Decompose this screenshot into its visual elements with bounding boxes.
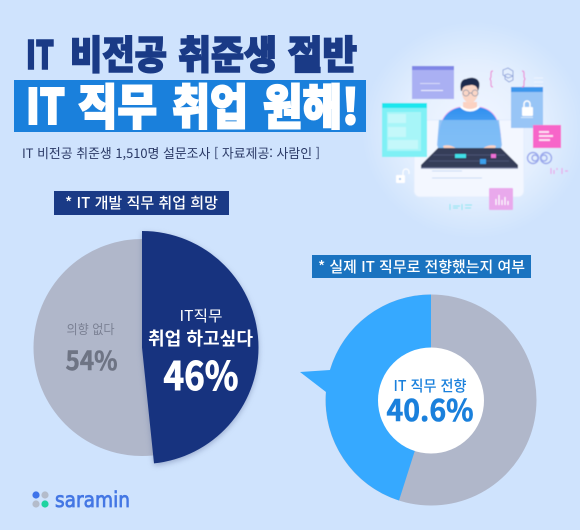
donut chart: actual transition [300,294,536,506]
title line 1: 비전공 [70,25,167,81]
chart tile [489,188,513,210]
title banner: IT [26,68,65,138]
logo: saramin: saramin [55,488,130,512]
label: no intention: 54% [66,341,118,378]
lock window [511,87,543,128]
person [437,78,502,157]
title banner [14,68,366,138]
label: want IT job [148,305,253,402]
hair [460,78,479,91]
centre label: IT 직무 전향 [394,375,467,396]
face [462,81,478,103]
glass panel lines [432,171,482,178]
keyboard [421,148,518,168]
donut slice: transitioned with pointer [300,294,431,500]
slice shadow [142,233,258,465]
pie slice: no intention [34,239,250,456]
donut slice: others [326,294,536,506]
label: IT dev job hope: * IT 개발 직무 취업 희망 [65,192,218,213]
title banner: 원해! [263,68,359,138]
menu lines [534,78,543,86]
open padlock [396,169,409,183]
neck [463,102,477,110]
centre label: 40.6% [386,386,474,430]
label: no intention [66,319,118,378]
title line 1: 절반 [288,25,357,81]
small marks [551,168,568,174]
logo: saramin [32,488,130,512]
pink card [533,125,561,148]
title line 1: IT [26,25,54,81]
glass panel [414,120,524,197]
purple window [412,66,454,99]
donut centre [378,348,484,454]
label: want IT job: IT직무 [180,305,223,326]
title line 1 [26,25,357,81]
cyan window [382,103,427,157]
code braces and cubes [490,68,525,87]
title banner: 직무 [78,68,157,138]
sweater [438,107,501,154]
title banner: 취업 [172,68,248,138]
title line 1: 취준생 [178,25,277,81]
pie chart: job hope [34,231,258,465]
label: want IT job: 46% [164,346,238,402]
label: actual transition: * 실제 IT 직무로 전향했는지 여부 [318,256,525,277]
label: no intention: 의향 없다 [66,319,115,338]
glasses [463,90,478,96]
label: want IT job: 취업 하고싶다 [148,325,253,351]
pie slice: want IT job [142,231,258,463]
subtitle: IT 비전공 취준생 1,510명 설문조사 [ 자료제공: 사람인 ] [22,143,320,162]
hands [443,145,462,157]
illustration: developer at keyboard [362,22,580,238]
ring icons [528,152,552,164]
